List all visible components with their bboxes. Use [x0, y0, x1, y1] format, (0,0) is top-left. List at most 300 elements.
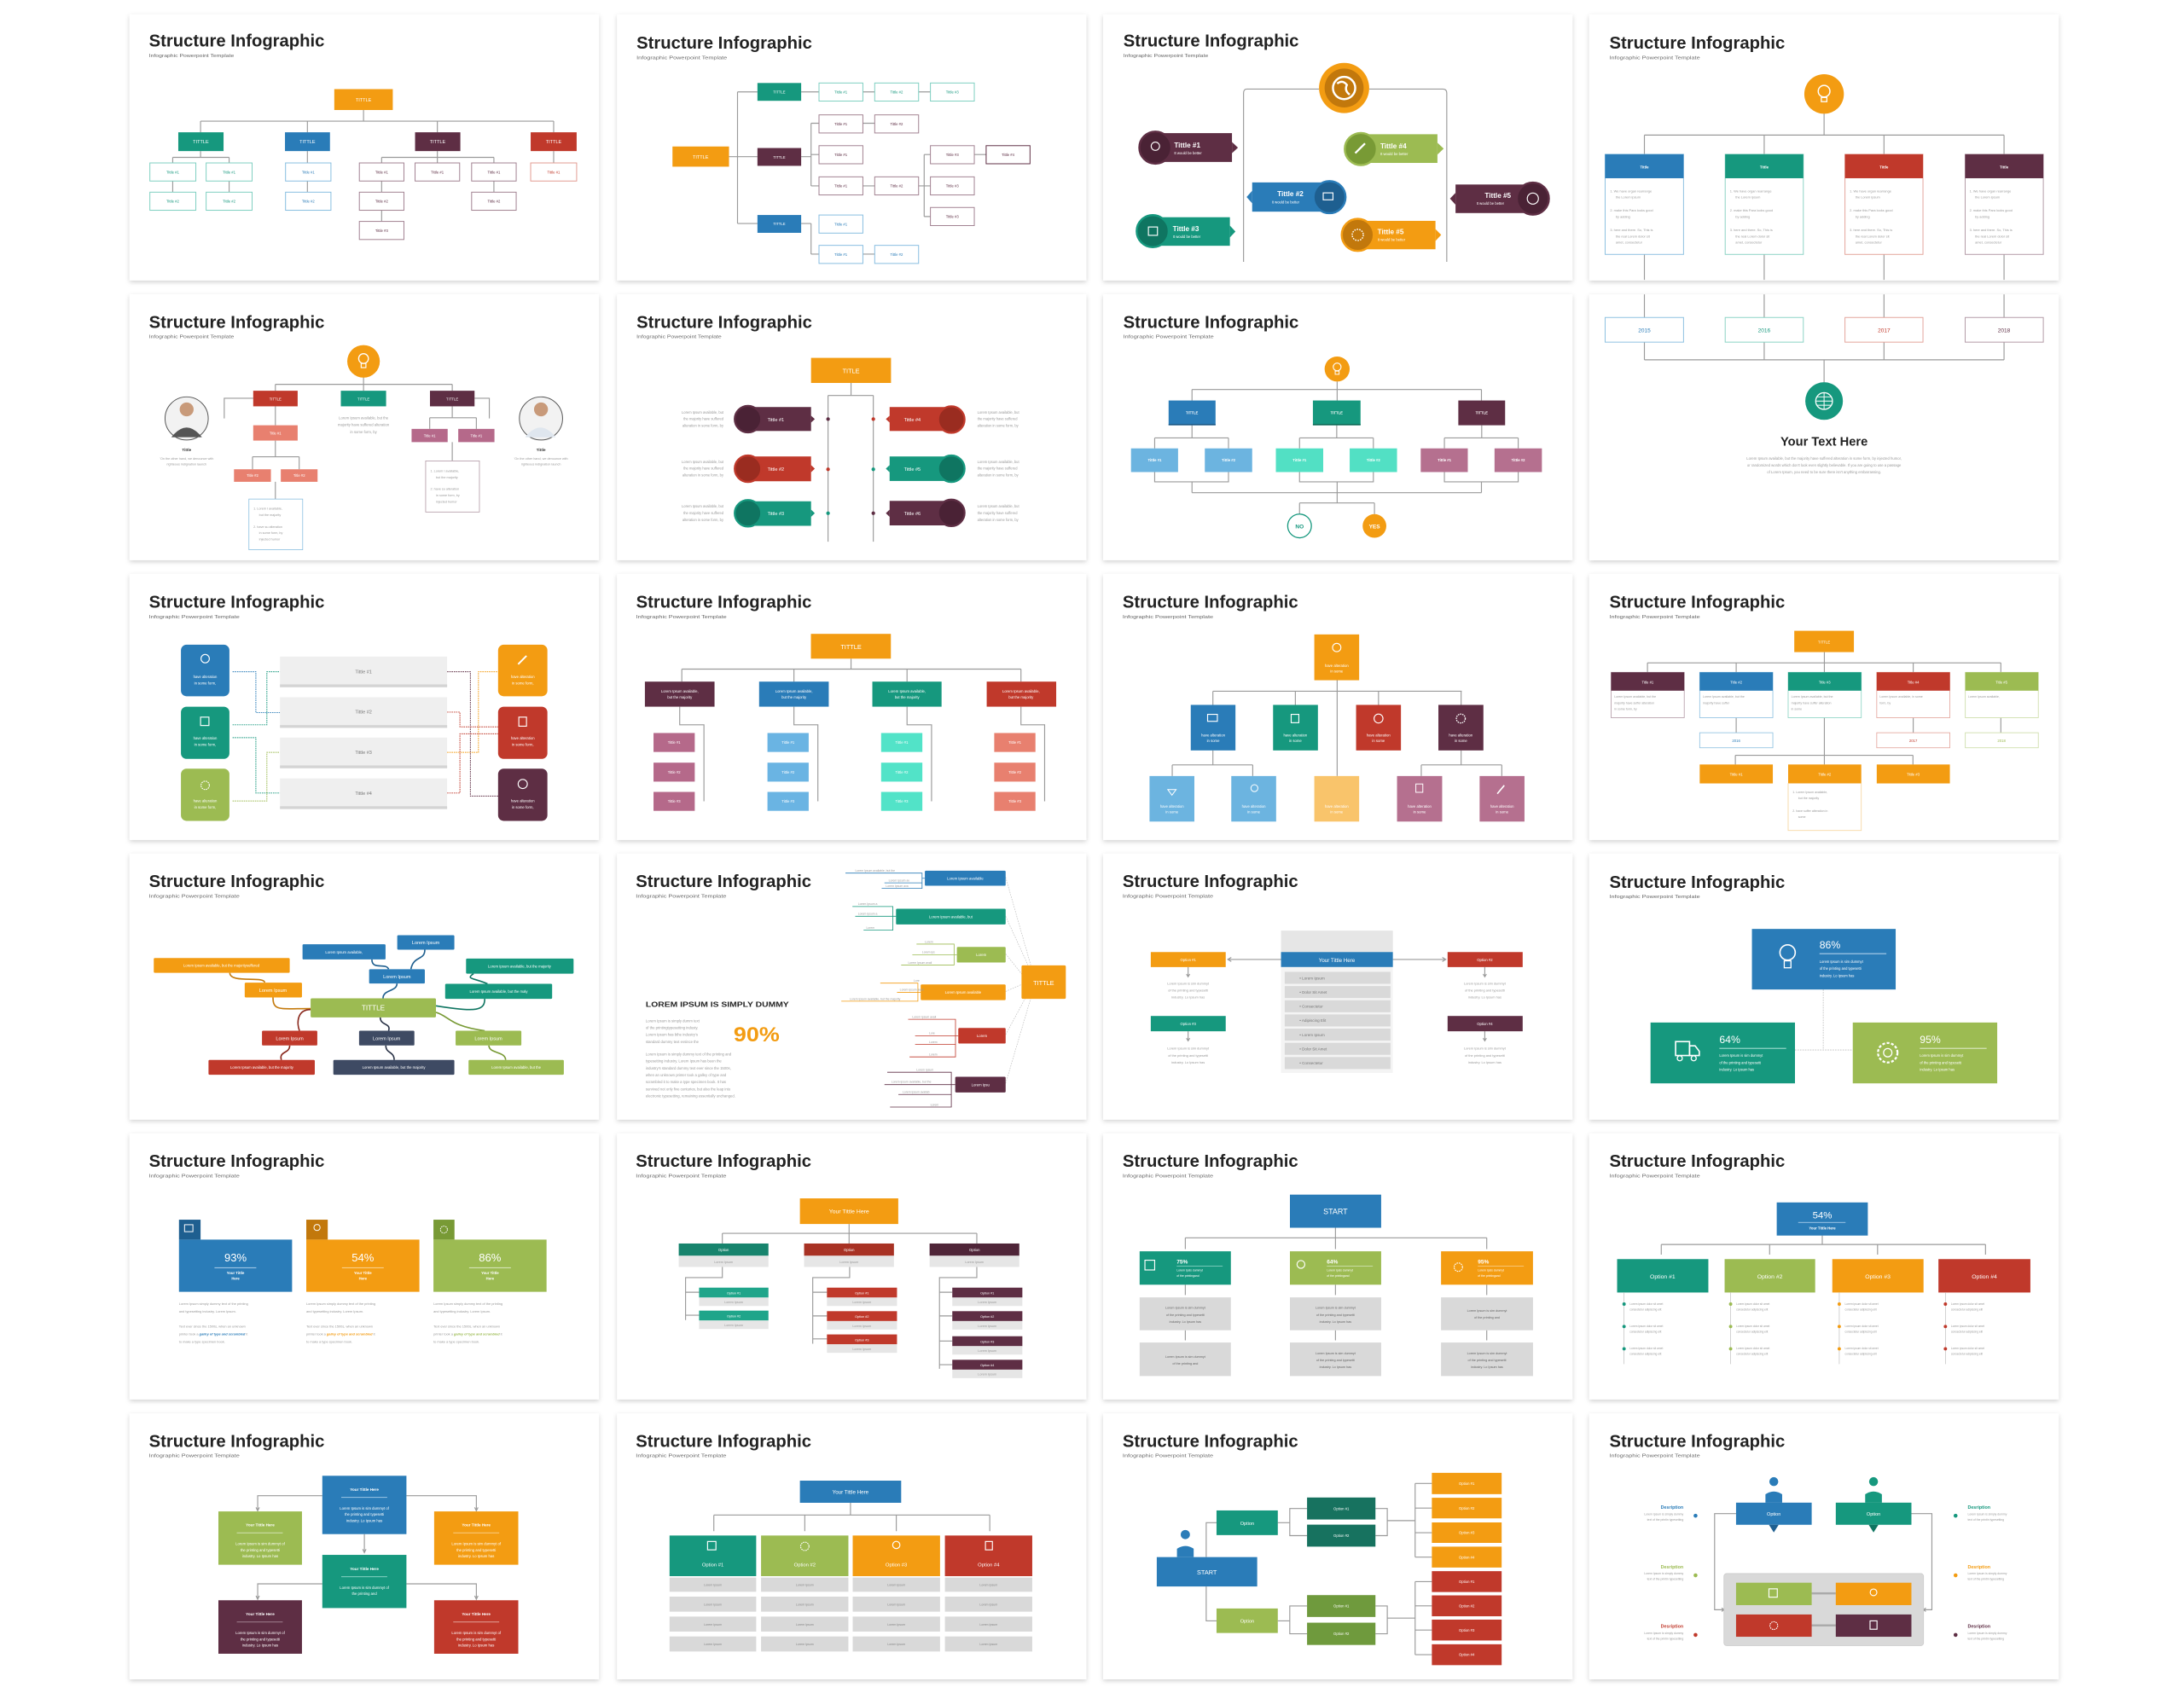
slide 1: org chart [130, 14, 599, 281]
slide 14: branched list with 90% stat: Lorem Ipsum avail [900, 989, 924, 992]
slide 12: five column timeline tree: in some [1792, 708, 1802, 711]
slide 5 title: Structure Infographic [149, 313, 324, 332]
slide 2: horizontal tree: Tittle #3 [946, 215, 959, 219]
slide 11 level 2: have alteration [1160, 804, 1184, 809]
slide 2 connectors [729, 92, 986, 254]
slide 4: four column cards: 3. here and there. So, This is [1970, 228, 2013, 232]
pill: Tittle #5 plum [1450, 183, 1549, 215]
slide 14: branched list with 90% stat: Lorem Ipsum availab [903, 1091, 930, 1094]
slide 17 captions: and typesetting industry. Lorem Ipsum. [179, 1309, 236, 1313]
slide 14 paragraphs: Lorem Ipsum is simply dumm text [646, 1018, 700, 1023]
slide 6 left pills: Tittle #2 [768, 467, 784, 473]
slide 19 gray boxes [1140, 1297, 1533, 1376]
folder 93%: Your Tittle [227, 1271, 245, 1275]
slide 14: branched list with 90% stat [617, 854, 1086, 1120]
slide 5 center text: in some form, by [350, 430, 378, 434]
slide 2 main boxes [672, 83, 801, 233]
slide 2 title: Infographic Powerpoint Template [636, 55, 727, 61]
slide 1 title: Infographic Powerpoint Template [149, 54, 234, 59]
slide 6 side text: Lorem Ipsum available, but [682, 460, 724, 464]
slide 19 cards: 64% [1327, 1260, 1339, 1266]
slide 12 root: TITTLE [1818, 640, 1830, 644]
pill: Tittle #3 [1136, 215, 1235, 247]
slide 9 left tiles: have alteration [194, 675, 218, 679]
slide 18 option headers [679, 1244, 1019, 1267]
slide 23 connectors [1206, 1483, 1432, 1655]
slide 9 bars [280, 657, 447, 809]
slide 22 root: Your Tittle Here [833, 1490, 869, 1496]
slide 5: people org chart [130, 294, 599, 560]
slide 11 level 2: in some [1165, 809, 1179, 814]
slide 17 captions: to make a type specimen book. [179, 1340, 225, 1344]
slide 19 gray boxes: of the printing and [1474, 1316, 1500, 1319]
slide 4: four column cards: 2. make this Para looks good [1970, 208, 2013, 212]
slide 19 gray boxes: Lorem Ipsum is sim dummyt [1316, 1307, 1356, 1310]
slide 12 title: Structure Infographic [1610, 594, 1785, 612]
slide 1: org chart: Tittle #2 [166, 200, 180, 204]
slide 20: 54% options with bullets [1589, 1133, 2059, 1400]
slide 8 text: Lorem Ipsum available, but the majority have suffered alteration in some form, by injected humor, [1746, 456, 1902, 461]
slide 10: four column tree: Tittle #2 [896, 770, 909, 774]
slide 14 branch boxes: Lorem Ipsu [972, 1082, 990, 1087]
slide 1: org chart: Tittle #3 [375, 229, 388, 233]
pill: Tittle #3: It would be better [1173, 235, 1201, 239]
slide 12 orange titles: 1. Lorem Ipsum available, [1792, 791, 1827, 794]
slide 23 option nodes: Option #1 [1333, 1506, 1350, 1510]
slide 4: four column cards: by adding [1616, 215, 1630, 219]
slide 18: option columns tree: Lorem Ipsum [724, 1301, 743, 1304]
slide 14 paragraphs: survived not only five centuries, but also the leap into [646, 1087, 731, 1091]
slide 10: four column tree: Tittle #1 [1008, 740, 1022, 745]
slide 4 title: Infographic Powerpoint Template [1610, 55, 1700, 61]
slide 18: option columns tree: Option #1 [980, 1292, 994, 1296]
slide 4: four column cards: the real Lorem dolor sit [1735, 234, 1770, 238]
slide 21 tiles: industry. Lo Ipsum has [242, 1644, 278, 1648]
slide 18 option headers: Lorem Ipsum [839, 1261, 858, 1264]
slide 4: four column cards: amet, consectetur [1856, 241, 1882, 245]
slide 5: people org chart: injected humor [259, 537, 281, 541]
slide 17 title: Infographic Powerpoint Template [149, 1174, 240, 1179]
slide 20 bullet lists: consectetur adipiscing elit [1951, 1353, 1983, 1356]
slide 17 title: Structure Infographic [149, 1152, 324, 1171]
slide 4: four column cards: amet, consectetur [1616, 241, 1643, 245]
slide 24 title: Structure Infographic [1610, 1432, 1785, 1451]
slide 22 column headers: Option #3 [886, 1563, 907, 1568]
slide 21 title: Structure Infographic [149, 1432, 324, 1451]
slide 22 title: Structure Infographic [636, 1432, 811, 1451]
slide 18: option columns tree [617, 1133, 1086, 1400]
slide 20 bullet lists: consectetur adipiscing elit [1844, 1353, 1877, 1356]
slide 12 connectors [1647, 652, 2001, 764]
slide 11 level 2: have alteration [1325, 804, 1349, 809]
slide 19 gray boxes: of the printing and [1172, 1362, 1198, 1365]
slide 19 cards: Lorem Ipsis dummyt [1478, 1269, 1504, 1273]
slide 9 left tiles: have alteration [194, 736, 218, 740]
slide 14 branch boxes: Lorem [976, 953, 987, 957]
slide 20 bullet lists: consectetur adipiscing elit [1629, 1307, 1662, 1311]
slide 20 bullet lists: consectetur adipiscing elit [1629, 1353, 1662, 1356]
slide 4: four column cards [1589, 14, 2059, 281]
slide 12: five column timeline tree [1589, 574, 2059, 840]
slide 1 level 2 boxes: TITTLE [430, 140, 446, 145]
slide 20 root 54% [1777, 1203, 1867, 1236]
slide 14: branched list with 90% stat: Lore [914, 979, 920, 983]
slide 24 right descriptions [1954, 1505, 2007, 1641]
slide 23 option nodes: Option [1240, 1620, 1254, 1625]
slide 7 no / yes [1287, 514, 1386, 538]
slide 22: option table: Lorem Ipsum [704, 1603, 722, 1606]
slide 6 title: Structure Infographic [636, 313, 812, 332]
slide 12 root [1794, 631, 1854, 652]
slide 15 options: Option #4 [1477, 1022, 1493, 1026]
slide 4: four column cards: the real Lorem dolor sit [1856, 234, 1891, 238]
slide 5: people org chart: but the majority [436, 476, 458, 479]
slide 5: people org chart: in some form, by [436, 494, 460, 497]
slide 22: option table: Lorem Ipsum [979, 1603, 997, 1606]
slide 20 bullet lists: Lorem ipsum dolor sit amet [1736, 1347, 1769, 1350]
slide 24 right descriptions: Desription [1967, 1625, 1990, 1630]
slide 1: org chart: Tittle #1 [302, 170, 315, 174]
slide 21 tiles: Your Tittle Here [350, 1487, 379, 1492]
slide 21 tiles: the printing and [352, 1592, 377, 1596]
slide 10: four column tree [617, 574, 1086, 840]
slide 2 main boxes: TITTLE [773, 90, 786, 94]
slide 22 root [800, 1481, 901, 1503]
slide 9: icon tiles with bars [130, 574, 599, 840]
slide 17 captions: to make a type specimen book. [433, 1340, 479, 1344]
slide 12: five column timeline tree: majority have suffer alteration [1792, 701, 1831, 704]
slide 24 left descriptions: Desription [1661, 1625, 1683, 1630]
slide 15 title: Infographic Powerpoint Template [1123, 894, 1213, 899]
slide 10 level 1: Lorem Ipsum available, [888, 689, 926, 693]
slide 11 title: Infographic Powerpoint Template [1123, 615, 1213, 620]
slide 20 bullet lists: consectetur adipiscing elit [1844, 1330, 1877, 1333]
slide 14 paragraphs: standard dummy text evsince the [646, 1040, 700, 1044]
slide 20 bullet lists: Lorem ipsum dolor sit amet [1844, 1325, 1879, 1328]
slide 23 option nodes: Option #2 [1333, 1632, 1350, 1636]
slide 4: four column cards: the Lorem ipsum [1975, 195, 2000, 200]
slide 12 orange titles: Tittle #2 [1818, 772, 1832, 776]
stat box 86%: industry. Lo Ipsum has [1820, 973, 1854, 977]
slide 10 level 1: Lorem Ipsum available, [1002, 689, 1040, 693]
slide 13 central node [311, 998, 436, 1018]
slide 1: org chart: Tittle #1 [548, 170, 561, 174]
slide 24 left descriptions: text of the printin typesetting [1647, 1518, 1683, 1522]
slide 22: option table: Lorem Ipsum [979, 1643, 997, 1646]
slide 22: option table: Lorem Ipsum [887, 1603, 905, 1606]
slide 2: horizontal tree: Tittle #2 [890, 184, 903, 188]
slide 20 bullet lists: Lorem ipsum dolor sit amet [1951, 1302, 1984, 1306]
slide 18 title: Structure Infographic [636, 1152, 811, 1171]
slide 19 cards: 75% [1176, 1260, 1188, 1266]
slide 2: horizontal tree: Tittle #2 [890, 252, 903, 257]
pill: Tittle #5 plum: Tittle #5 [1484, 192, 1512, 200]
slide 19 cards: Lorem Ipsis dummyt [1176, 1269, 1203, 1273]
slide 5: people org chart: injected humor [436, 500, 457, 503]
slide 21 tiles: industry. Lo Ipsum has [458, 1644, 494, 1648]
slide 6 root: TITLE [843, 368, 860, 375]
slide 13 nodes: Lorem Ipsum available, but the majority [230, 1065, 294, 1070]
slide 19 title: Structure Infographic [1123, 1152, 1298, 1171]
slide 21 tiles: industry. Lo Ipsum has [242, 1554, 278, 1558]
slide 4: four column cards: 3. here and there. So, This is [1850, 228, 1892, 232]
slide 14: branched list with 90% stat: Lorem Ipsum available, but the [855, 869, 895, 873]
slide 6 right pills: Tittle #4 [904, 418, 921, 423]
slide 14 paragraphs [646, 1018, 735, 1099]
slide 2: horizontal tree: Tittle #1 [834, 122, 848, 126]
slide 24 right descriptions: Lorem Ipsum is simply dummy [1967, 1572, 2007, 1575]
slide 2: horizontal tree: Tittle #1 [834, 153, 848, 157]
slide 23 leaf options: Option #4 [1459, 1653, 1475, 1657]
slide 20 bullet lists: Lorem ipsum dolor sit amet [1629, 1347, 1663, 1350]
slide 17 captions: and typesetting industry. Lorem Ipsum. [306, 1309, 363, 1313]
slide 2: horizontal tree: Tittle #2 [890, 122, 903, 126]
slide 24 left descriptions: Lorem Ipsum is simply dummy [1644, 1572, 1684, 1575]
slide 4: four column cards: the Lorem ipsum [1616, 195, 1641, 200]
slide 17: three percentage folders [130, 1133, 599, 1400]
slide 12 year boxes: 2018 [1997, 739, 2006, 743]
slide 17 captions: printer took a galley of type and scrambled it [179, 1332, 248, 1336]
slide 14 heading: LOREM IPSUM IS SIMPLY DUMMY [646, 1000, 789, 1008]
slide 2 main boxes: TITTLE [693, 155, 709, 160]
stat box 64%: industry. Lo Ipsum has [1719, 1068, 1754, 1072]
slide 19 gray boxes: industry. Lo Ipsum has [1320, 1320, 1351, 1324]
slide 19 gray boxes: of the printing and typesetti [1166, 1313, 1205, 1317]
slide 3 title: Structure Infographic [1124, 32, 1298, 51]
slide 19 title: Infographic Powerpoint Template [1123, 1174, 1213, 1179]
slide 8 text [1746, 435, 1902, 474]
slide 10 level 1: but the majority [895, 695, 921, 699]
person left: righteous indignation launch [166, 462, 206, 466]
slide 6 side text: the majority have suffered [683, 417, 723, 421]
slide 7 no / yes: YES [1369, 524, 1380, 530]
slide 21 tiles: Lorem Ipsum is sim dummyt of [451, 1631, 502, 1635]
slide 24 option boxes [1736, 1503, 1911, 1533]
slide 7 level 1: TITTLE [1476, 411, 1488, 415]
slide 20 bullet lists: consectetur adipiscing elit [1844, 1307, 1877, 1311]
slide 11 level 1: have alteration [1283, 733, 1308, 738]
stat box 64%: Lorem Ipsum is sim dummyt [1719, 1053, 1763, 1058]
slide 16 dashed links [1795, 989, 1853, 1050]
slide 13 nodes: Lorem Ipsum available, but the maly [469, 989, 528, 994]
slide 19: start with three percentage cards [1103, 1133, 1572, 1400]
slide 20 bullet lists: Lorem ipsum dolor sit amet [1844, 1302, 1879, 1306]
slide 8 text: Your Text Here [1780, 435, 1867, 449]
slide 4: four column cards: amet, consectetur [1735, 241, 1763, 245]
icon: person [1177, 1530, 1194, 1557]
slide 18 option headers: Lorem Ipsum [714, 1261, 733, 1264]
slide 23 option nodes [1217, 1498, 1375, 1645]
pill: Tittle #4: Tittle #4 [1380, 142, 1407, 150]
slide 12 title: Infographic Powerpoint Template [1610, 615, 1700, 620]
slide 14 branch boxes [896, 871, 1006, 1093]
slide 1 outline leaf boxes [150, 163, 577, 240]
slide 2: horizontal tree: Tittle #4 [1002, 153, 1015, 157]
slide 1 root box [334, 89, 392, 110]
slide 8 text: of Lorem Ipsum, you need to be sure there isn't anything embarrassing. [1767, 470, 1881, 474]
slide 24 left descriptions: Desription [1661, 1565, 1683, 1570]
slide 24 right descriptions: text of the printin typesetting [1967, 1578, 2004, 1581]
slide 10: four column tree: Tittle #1 [781, 740, 795, 745]
slide 7 level 2: Tittle #1 [1438, 458, 1452, 462]
slide 18 sub options [699, 1288, 1022, 1378]
slide 2: horizontal tree: Tittle #1 [834, 222, 848, 226]
slide 8 year boxes [1605, 317, 2043, 342]
slide 12: five column timeline tree: Lorem Ipsum available, [1968, 695, 2000, 699]
slide 23 leaf options: Option #3 [1459, 1531, 1475, 1535]
slide 13 nodes: Lorem Ipsum available, but the majoritysuffered [183, 964, 260, 968]
slide 3: globe with pill labels [1103, 14, 1572, 281]
slide 18 option headers: Option [718, 1248, 729, 1252]
slide 11 level 2: have alteration [1408, 804, 1432, 809]
slide 14 branch boxes: Lorem [977, 1034, 987, 1038]
folder 86%: Your Tittle [481, 1271, 499, 1275]
slide 12 year boxes: 2016 [1732, 739, 1740, 743]
slide 20 bullet lists: Lorem ipsum dolor sit amet [1736, 1325, 1769, 1328]
slide 7 level 2: Tittle #2 [1512, 458, 1525, 462]
slide 17 captions: to make a type specimen book. [306, 1340, 352, 1344]
slide 10 level 1: but the majority [667, 695, 693, 699]
slide 21 tiles: Your Tittle Here [462, 1522, 491, 1527]
slide 5 sub boxes: Title #2 [247, 473, 259, 478]
slide 22: option table: Lorem Ipsum [979, 1623, 997, 1626]
slide 13 curved connectors [229, 949, 506, 1060]
slide 10 level 1 [645, 681, 1056, 707]
slide 9 right tiles: in some form, [512, 805, 534, 809]
slide 5: people org chart: in some form, by [259, 531, 283, 535]
slide 15: centre list with options: industry. Lo Ipsum has [1468, 995, 1502, 1000]
slide 6 title: Infographic Powerpoint Template [636, 335, 722, 340]
slide 22: option table: Lorem Ipsum [887, 1623, 905, 1626]
icon: bulb [347, 345, 380, 378]
slide 16 title: Structure Infographic [1610, 873, 1785, 892]
slide 9 left tiles: have alteration [194, 798, 218, 803]
slide 12: five column timeline tree: Lorem Ipsum available, in some [1879, 695, 1923, 699]
slide 14: branched list with 90% stat: Lorem [931, 1103, 938, 1106]
pill: Tittle #1 [1140, 131, 1238, 164]
slide 4: four column cards: by adding [1735, 215, 1750, 219]
slide 7: decision tree [1103, 294, 1572, 560]
slide 14 paragraphs: Lorem Ipsum has bthe industry's [646, 1033, 698, 1037]
slide 21 tiles: industry. Lo Ipsum has [346, 1519, 382, 1523]
slide 15 centre list: • Lorem Ipsum [1299, 976, 1325, 980]
slide 9 right tiles [498, 645, 548, 820]
slide 22 column headers: Option #4 [978, 1563, 1000, 1568]
slide 1: org chart: Tittle #2 [223, 200, 236, 204]
slide 17 captions: Lorem Ipsum simply dummy text of the printing [433, 1302, 502, 1306]
slide 6 side text: the majority have suffered [978, 511, 1017, 515]
slide 12 cards: Title #1 [1642, 681, 1654, 685]
slide 7 level 1: TITTLE [1331, 411, 1343, 415]
slide 4 cards: Tittle [1640, 165, 1649, 170]
slide 12: five column timeline tree: in some form, by [1614, 708, 1637, 711]
slide 5 sub boxes: Title #1 [270, 431, 282, 435]
slide 9 bars: Tittle #4 [355, 791, 372, 797]
slide 18 title: Infographic Powerpoint Template [636, 1174, 726, 1179]
slide 9 title: Infographic Powerpoint Template [149, 615, 240, 620]
slide 5 sub boxes: Title #1 [471, 434, 483, 438]
slide 11 top box: in some [1330, 670, 1344, 674]
slide 2: horizontal tree: Tittle #3 [946, 184, 959, 188]
slide 10 level 1: Lorem Ipsum available, [775, 689, 813, 693]
slide 2: horizontal tree: Tittle #1 [834, 184, 848, 188]
slide 15: centre list with options: Lorem Ipsum is sim dummyt [1464, 981, 1507, 985]
slide 24 right descriptions: Lorem Ipsum is simply dummy [1967, 1632, 2007, 1635]
slide 10: four column tree: Tittle #3 [781, 799, 795, 803]
slide 17 captions: Lorem Ipsum simply dummy text of the printing [179, 1302, 248, 1306]
slide 4 cards: Tittle [1760, 165, 1769, 170]
pill: Tittle #5 orange [1342, 219, 1441, 251]
slide 9 right tiles: have alteration [511, 675, 535, 679]
slide 22: option table: Lorem Ipsum [796, 1603, 814, 1606]
slide 20 option boxes: Option #3 [1865, 1274, 1891, 1280]
slide 19 gray boxes: of the printing and typesetti [1468, 1359, 1507, 1362]
slide 6 side text: the majority have suffered [978, 417, 1017, 421]
slide 5 sub boxes: Title #1 [424, 434, 436, 438]
slide 12 cards: Title #2 [1730, 681, 1743, 685]
slide 12 orange titles: some [1798, 815, 1806, 819]
slide 7 level 2: Tittle #1 [1148, 458, 1162, 462]
slide 20 connectors [1661, 1236, 1985, 1255]
slide 19 gray boxes: industry. Lo Ipsum has [1170, 1320, 1201, 1324]
slide 11: icon tree [1103, 574, 1572, 840]
slide 13 nodes: Lorem Ipsum available, but the majority [363, 1065, 426, 1070]
stat box 95% [1853, 1023, 1997, 1083]
icon: globe circle [1319, 63, 1369, 113]
slide 9 bars: Tittle #2 [355, 710, 372, 716]
slide 20 bullet lists: Lorem ipsum dolor sit amet [1951, 1347, 1984, 1350]
slide 20 bullet lists [1623, 1292, 1984, 1364]
slide 4: four column cards: 1. We have organ rearrange [1850, 188, 1891, 193]
slide 4: four column cards: 2. make this Para looks good [1610, 208, 1653, 212]
slide 14: branched list with 90% stat: Lorem Ipsum a [858, 913, 878, 916]
slide 10: four column tree: Tittle #2 [668, 770, 681, 774]
slide 11 connectors [1172, 681, 1502, 776]
slide 11 level 1: in some [1289, 739, 1302, 743]
slide 14: branched list with 90% stat: Lorem ips [922, 951, 935, 954]
slide 22 title: Infographic Powerpoint Template [636, 1454, 726, 1459]
slide 24 title: Infographic Powerpoint Template [1610, 1454, 1700, 1459]
slide 8 year boxes: 2017 [1878, 328, 1891, 333]
slide 6 root [811, 358, 891, 383]
slide 19 gray boxes: industry. Lo Ipsum has [1320, 1365, 1351, 1369]
slide 6 right pills [886, 406, 965, 526]
slide 15 options: Option #2 [1477, 958, 1493, 962]
slide 2 title: Structure Infographic [636, 34, 812, 53]
slide 12 orange titles: Tittle #1 [1730, 772, 1743, 776]
slide 18 root: Your Tittle Here [829, 1209, 869, 1215]
slide 13 nodes: Lorem Ipsum [259, 989, 288, 994]
slide 23 leaf options: Option #2 [1459, 1506, 1475, 1510]
slide 1 level 2 boxes: TITTLE [546, 140, 562, 145]
slide 22: option table: Lorem Ipsum [704, 1643, 722, 1646]
slide 23 option nodes: Option [1240, 1522, 1254, 1527]
slide 20 bullet lists: consectetur adipiscing elit [1736, 1307, 1768, 1311]
slide 10 level 1: Lorem Ipsum available, [661, 689, 699, 693]
slide 13 nodes: Lorem Ipsum [383, 975, 411, 980]
folder 54%: Here [359, 1276, 368, 1280]
slide 13 nodes: Lorem Ipsum available, but the [491, 1065, 542, 1070]
slide 17 captions: Text ever since the 1500s, when an unknown [306, 1325, 373, 1329]
slide 15 centre list: • Consectetur [1299, 1061, 1323, 1065]
folder 93% [179, 1220, 292, 1292]
slide 5 center text [338, 415, 390, 434]
slide 7 level 1 [1169, 401, 1505, 426]
slide 15 centre list: • Dolor Sit Amet [1299, 990, 1327, 994]
slide 23 title: Infographic Powerpoint Template [1123, 1454, 1213, 1459]
icon: bulb [1325, 357, 1350, 381]
slide 9 bars: Tittle #3 [355, 751, 372, 756]
